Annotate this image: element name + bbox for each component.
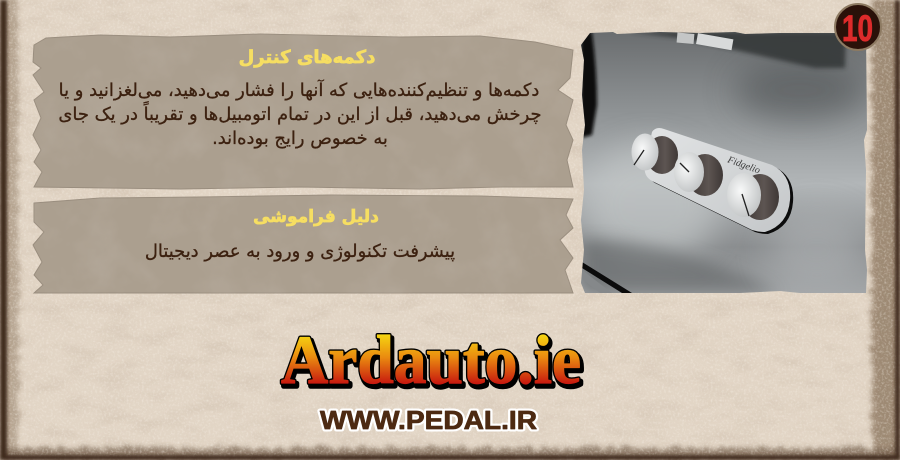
panel body text — [58, 78, 542, 149]
control plate — [632, 128, 793, 234]
website url: WWW.PEDAL.IR — [320, 405, 537, 435]
panel body text: به خصوص رایج بوده‌اند. — [212, 128, 388, 149]
panel body text: چرخش می‌دهید، قبل از این در تمام اتومبیل‌ها و تقریباً در یک جای — [58, 101, 542, 125]
panel body text: پیشرفت تکنولوژی و ورود به عصر دیجیتال — [145, 241, 455, 262]
panel: control knobs description — [33, 34, 573, 189]
control plate: Fidgelio — [725, 154, 762, 176]
number badge: 10: 10 — [842, 8, 873, 49]
logo: Ardauto.ie: Ardauto.ie — [281, 322, 581, 398]
knob 3 — [727, 173, 779, 220]
knob 1 — [632, 134, 678, 174]
logo: Ardauto.ie: Ardauto.ie — [281, 322, 581, 398]
panel: reason forgotten — [33, 195, 573, 293]
panel body text: دکمه‌ها و تنظیم‌کننده‌هایی که آنها را فشار می‌دهید، می‌لغزانید و یا — [59, 78, 539, 101]
logo: Ardauto.ie: Ardauto.ie — [283, 325, 583, 401]
panel heading: دکمه‌های کنترل — [239, 47, 375, 68]
website url: WWW.PEDAL.IR — [320, 405, 537, 435]
knob 2 — [674, 152, 723, 196]
panel heading: دلیل فراموشی — [253, 207, 379, 227]
photo: dashboard knobs — [581, 32, 867, 294]
